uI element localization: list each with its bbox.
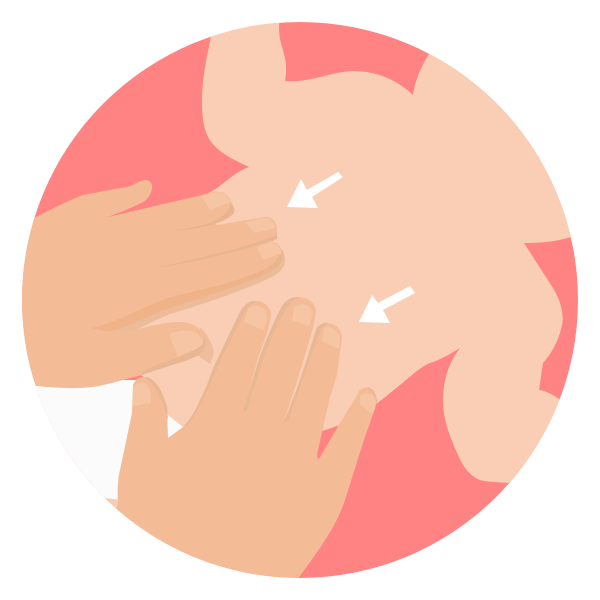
finger three shadow [261, 251, 282, 272]
right nail two [292, 304, 312, 326]
finger two edge [243, 297, 298, 412]
finger one shadow [178, 204, 234, 230]
skin sliver lower left [105, 498, 122, 514]
thumb edge [146, 377, 168, 420]
left thumb nail [169, 331, 203, 357]
little finger edge [368, 387, 377, 418]
white gap under hand [108, 330, 126, 334]
hand: right [100, 297, 377, 590]
finger one edge [183, 301, 255, 427]
finger three edge [283, 323, 327, 423]
shadow band under left hand [92, 250, 283, 332]
left thumb shadow [142, 335, 206, 375]
shadow under left thumb [198, 327, 214, 364]
finger two shadow [157, 235, 277, 268]
arrow: upper [287, 172, 343, 208]
arrow: lower [359, 286, 415, 323]
left nail three [257, 242, 282, 260]
right hand silhouette [100, 297, 377, 590]
right thumb nail [133, 383, 151, 406]
right nail one [244, 306, 267, 330]
lighter band edge under left hand [105, 252, 285, 334]
skin patch [90, 10, 600, 483]
left palm and fingers [0, 180, 283, 388]
right nail three [322, 327, 340, 349]
left nail two [245, 218, 275, 233]
right nail four [360, 393, 376, 413]
white cloth lower left [34, 380, 183, 530]
hand: left [0, 180, 283, 388]
left nail one [202, 192, 230, 210]
